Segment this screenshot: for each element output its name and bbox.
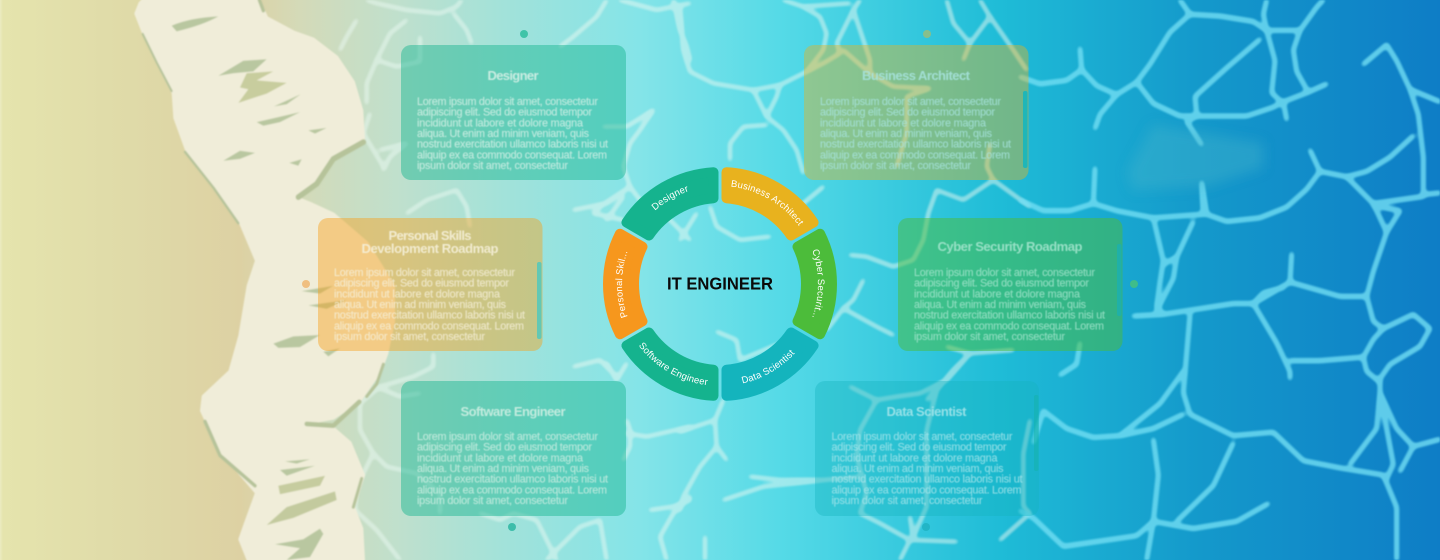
card text: ipsum dolor sit amet, consectetur [832,495,983,507]
card text: adipiscing elit. Sed do eiusmod tempor [832,442,1007,454]
card: Data Scientist [815,381,1039,531]
card text: nostrud exercitation ullamco laboris nisi ut [417,474,608,486]
card text: Data Scientist [886,404,967,419]
segment: Designer [621,167,718,240]
card text [820,68,1011,172]
connector dot [520,30,528,38]
card text [417,404,608,507]
card text: adipiscing elit. Sed do eiusmod tempor [334,278,509,290]
water caustics: right [1020,0,1440,560]
card text: nostrud exercitation ullamco laboris nisi ut [820,139,1011,151]
card text: aliqua. Ut enim ad minim veniam, quis [417,128,590,140]
card text: aliqua. Ut enim ad minim veniam, quis [914,299,1087,311]
beach foam [136,0,393,560]
card text: adipiscing elit. Sed do eiusmod tempor [417,442,592,454]
card text [417,68,608,172]
card text: nostrud exercitation ullamco laboris nisi ut [334,310,525,322]
card text: incididunt ut labore et dolore magna [417,117,583,129]
connector dot [922,523,930,531]
segment: Business Architect [722,167,819,240]
card text: Lorem ipsum dolor sit amet, consectetur [417,96,598,108]
segment: Personal Skills [603,228,648,340]
connector dot [923,30,931,38]
card text: adipiscing elit. Sed do eiusmod tempor [417,107,592,119]
segment: Business Architect: Business Architect [731,180,804,226]
segment: Software Engineer: Software Engineer [640,342,708,385]
segment: Data Scientist: Data Scientist [742,350,795,384]
card: Cyber Security Roadmap [898,218,1138,351]
card text: aliquip ex ea commodo consequat. Lorem [334,320,524,332]
card text: Software Engineer [460,404,566,419]
connector dot [302,280,310,288]
card text: Business Architect [862,68,971,83]
card text: Development Roadmap [362,241,499,256]
card: Personal Skills Development Roadmap [302,218,542,351]
water caustics: middle [340,0,1030,560]
card text: Personal Skills [388,228,472,243]
card: Designer [401,30,626,180]
card text: ipsum dolor sit amet, consectetur [914,331,1065,343]
connector dot [1130,280,1138,288]
card text: aliquip ex ea commodo consequat. Lorem [417,149,607,161]
card text: aliquip ex ea commodo consequat. Lorem [417,484,607,496]
card text: nostrud exercitation ullamco laboris nisi ut [417,139,608,151]
card text: ipsum dolor sit amet, consectetur [820,160,971,172]
card text: nostrud exercitation ullamco laboris nisi ut [914,310,1105,322]
card text: aliqua. Ut enim ad minim veniam, quis [334,299,507,311]
water reflection patch [1127,125,1263,190]
segment: Designer: Designer [651,186,688,210]
card text: aliquip ex ea commodo consequat. Lorem [820,149,1010,161]
segment: Cyber Security [792,228,837,340]
card text: Lorem ipsum dolor sit amet, consectetur [334,267,515,279]
card text [832,404,1022,507]
card text: aliqua. Ut enim ad minim veniam, quis [417,463,590,475]
connector dot [508,523,516,531]
card text: aliquip ex ea commodo consequat. Lorem [832,484,1022,496]
card text: ipsum dolor sit amet, consectetur [417,495,568,507]
card: Business Architect [804,30,1028,180]
card text: Cyber Security Roadmap [938,239,1083,254]
card text: aliqua. Ut enim ad minim veniam, quis [832,463,1004,475]
card text: incididunt ut labore et dolore magna [334,288,500,300]
card text: Lorem ipsum dolor sit amet, consectetur [832,431,1013,443]
card text [334,228,525,343]
card text: Designer [488,68,538,83]
card text: Lorem ipsum dolor sit amet, consectetur [820,96,1001,108]
card text: aliqua. Ut enim ad minim veniam, quis [820,128,993,140]
card text [914,239,1105,343]
scrollbar [537,262,542,339]
card text: aliquip ex ea commodo consequat. Lorem [914,320,1104,332]
center title: IT ENGINEER [667,274,773,294]
card text: nostrud exercitation ullamco laboris nisi ut [832,474,1022,486]
segment: Software Engineer [622,328,718,401]
card text: ipsum dolor sit amet, consectetur [334,331,485,343]
scrollbar [1117,244,1122,316]
foam streaks [172,16,347,560]
ring diagram [603,167,837,401]
card text: ipsum dolor sit amet, consectetur [417,160,568,172]
card text: Lorem ipsum dolor sit amet, consectetur [914,267,1095,279]
card text: incididunt ut labore et dolore magna [832,452,998,464]
foam shadow edges [143,0,383,507]
card text: incididunt ut labore et dolore magna [417,452,583,464]
scrollbar [1023,91,1028,168]
segment: Data Scientist [722,328,818,401]
card text: adipiscing elit. Sed do eiusmod tempor [820,107,995,119]
card text: incididunt ut labore et dolore magna [914,288,1080,300]
scrollbar [1034,395,1038,471]
segment: Personal Skills: Personal Skil... [615,252,628,318]
card text: Lorem ipsum dolor sit amet, consectetur [417,431,598,443]
card: Software Engineer [401,381,626,531]
segment: Cyber Security: Cyber Securit... [812,250,825,317]
card text: incididunt ut labore et dolore magna [820,117,986,129]
card text: adipiscing elit. Sed do eiusmod tempor [914,278,1089,290]
